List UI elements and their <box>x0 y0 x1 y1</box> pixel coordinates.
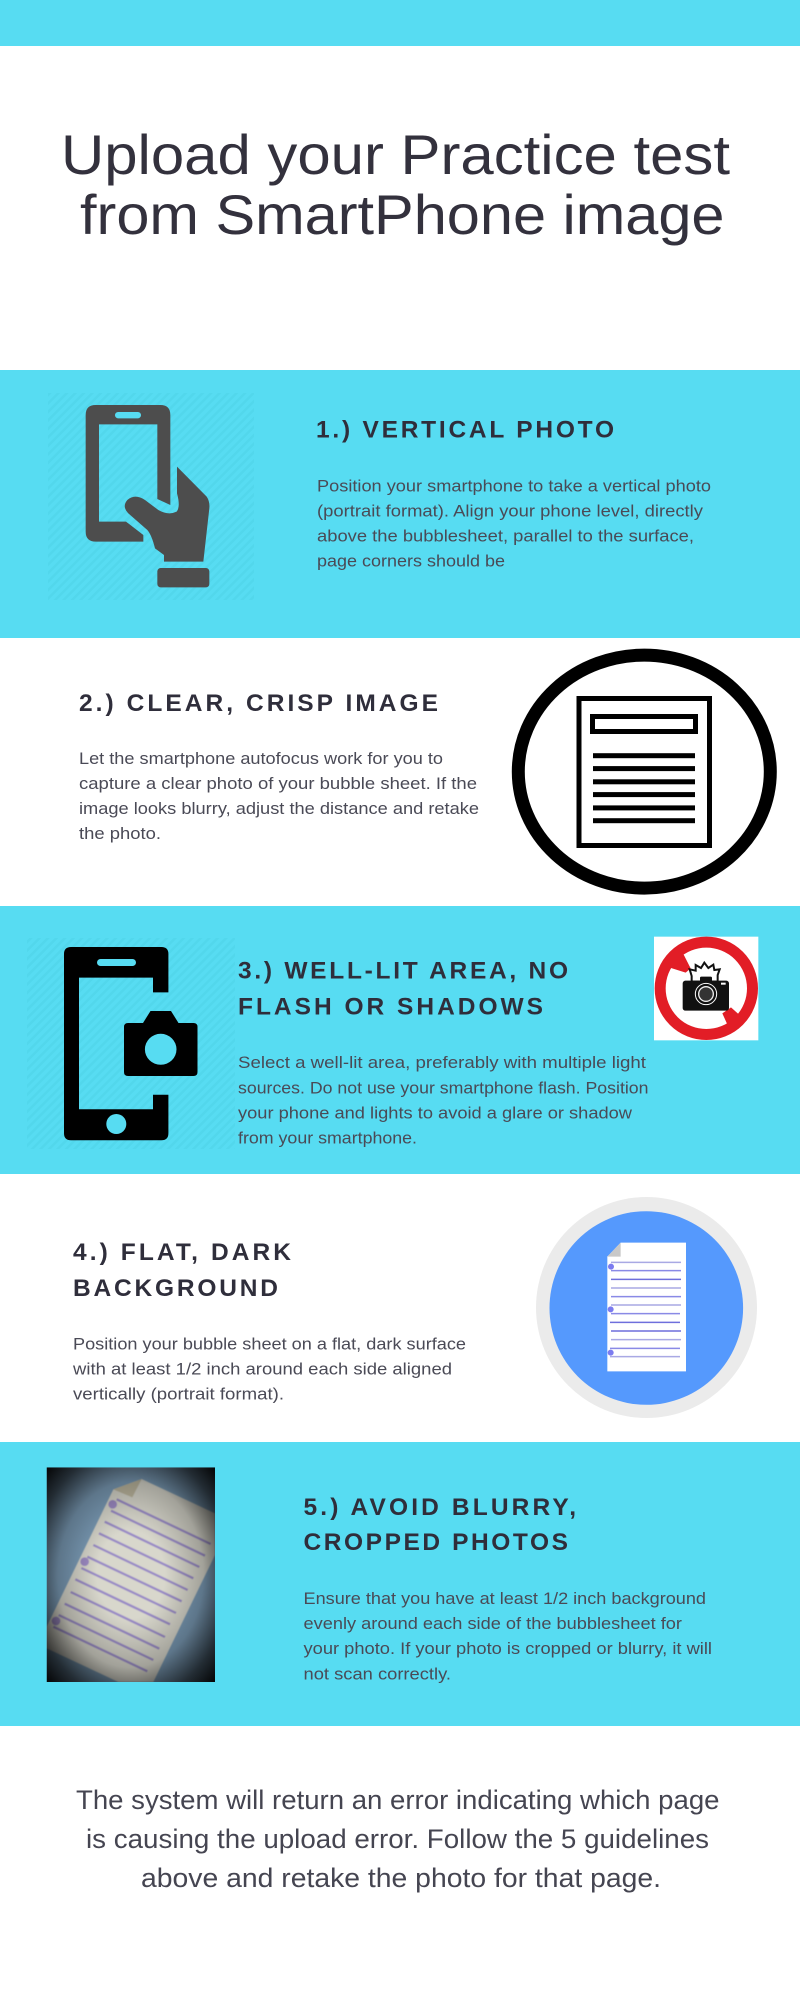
icon: paper on blue circle <box>536 1197 757 1418</box>
title <box>61 123 730 246</box>
text: step 3 body: your phone and lights to avoid a glare or shadow <box>238 1105 632 1123</box>
text: step 5 body: your photo. If your photo is cropped or blurry, it will <box>304 1640 712 1658</box>
top band <box>0 0 800 46</box>
heading: step 4 <box>73 1239 291 1302</box>
text: step 1 body: above the bubblesheet, parallel to the surface, <box>317 527 694 545</box>
panel: step 3 well-lit area <box>0 906 800 1174</box>
heading: step 3: FLASH OR SHADOWS <box>238 994 543 1020</box>
icon: no flash sign <box>654 937 758 1040</box>
text: step 1 body: page corners should be <box>317 552 505 570</box>
footer note: is causing the upload error. Follow the 5 guidelines <box>86 1824 709 1854</box>
heading: step 5: CROPPED PHOTOS <box>304 1529 568 1556</box>
text: step 3 body: from your smartphone. <box>238 1129 417 1147</box>
text: step 2 body: capture a clear photo of your bubble sheet. If the <box>79 775 477 793</box>
heading: step 3 <box>238 958 568 1020</box>
text: step 2 body <box>79 750 479 843</box>
heading: step 2: 2.) CLEAR, CRISP IMAGE <box>79 690 438 717</box>
text: step 1 body: (portrait format). Align your phone level, directly <box>317 502 704 520</box>
heading: step 3: 3.) WELL-LIT AREA, NO <box>238 958 568 985</box>
heading: step 1: 1.) VERTICAL PHOTO <box>316 416 614 444</box>
text: step 5 body: Ensure that you have at least 1/2 inch background <box>304 1590 706 1608</box>
text: step 2 body: image looks blurry, adjust the distance and retake <box>79 800 479 818</box>
text: step 4 body: with at least 1/2 inch around each side aligned <box>72 1360 452 1378</box>
text: step 1 body <box>317 477 711 570</box>
icon: phone with camera <box>27 938 235 1149</box>
text: step 4 body: Position your bubble sheet on a flat, dark surface <box>73 1336 466 1354</box>
text: step 4 body: vertically (portrait format). <box>73 1386 284 1404</box>
text: step 5 body <box>304 1590 712 1683</box>
heading: step 5: 5.) AVOID BLURRY, <box>304 1494 576 1521</box>
heading: step 4: BACKGROUND <box>73 1275 278 1302</box>
text: step 3 body: Select a well-lit area, preferably with multiple light <box>238 1054 646 1072</box>
panel: step 2 clear crisp image <box>0 638 800 906</box>
icon: document in circle <box>518 655 770 888</box>
text: step 2 body: the photo. <box>79 825 161 843</box>
footer note <box>76 1785 719 1893</box>
panel: step 4 flat dark background <box>0 1174 800 1442</box>
text: step 4 body <box>72 1336 466 1404</box>
text: step 5 body: evenly around each side of the bubblesheet for <box>304 1615 683 1633</box>
text: step 3 body <box>238 1054 648 1147</box>
title: from SmartPhone image <box>80 183 724 246</box>
heading: step 5 <box>304 1494 576 1556</box>
panel: step 5 avoid blurry photos <box>0 1442 800 1726</box>
icon: hand holding phone <box>48 393 254 600</box>
title: Upload your Practice test <box>61 123 730 186</box>
panel: step 1 vertical photo <box>0 370 800 638</box>
text: step 1 body: Position your smartphone to take a vertical photo <box>317 477 711 495</box>
image: blurry tilted photo of sheet <box>47 1467 215 1682</box>
text: step 2 body: Let the smartphone autofocus work for you to <box>79 750 443 768</box>
heading: step 4: 4.) FLAT, DARK <box>73 1239 291 1266</box>
footer note: The system will return an error indicating which page <box>76 1785 719 1815</box>
footer note: above and retake the photo for that page. <box>141 1863 661 1893</box>
text: step 5 body: not scan correctly. <box>304 1665 451 1683</box>
text: step 3 body: sources. Do not use your smartphone flash. Position <box>238 1079 648 1097</box>
